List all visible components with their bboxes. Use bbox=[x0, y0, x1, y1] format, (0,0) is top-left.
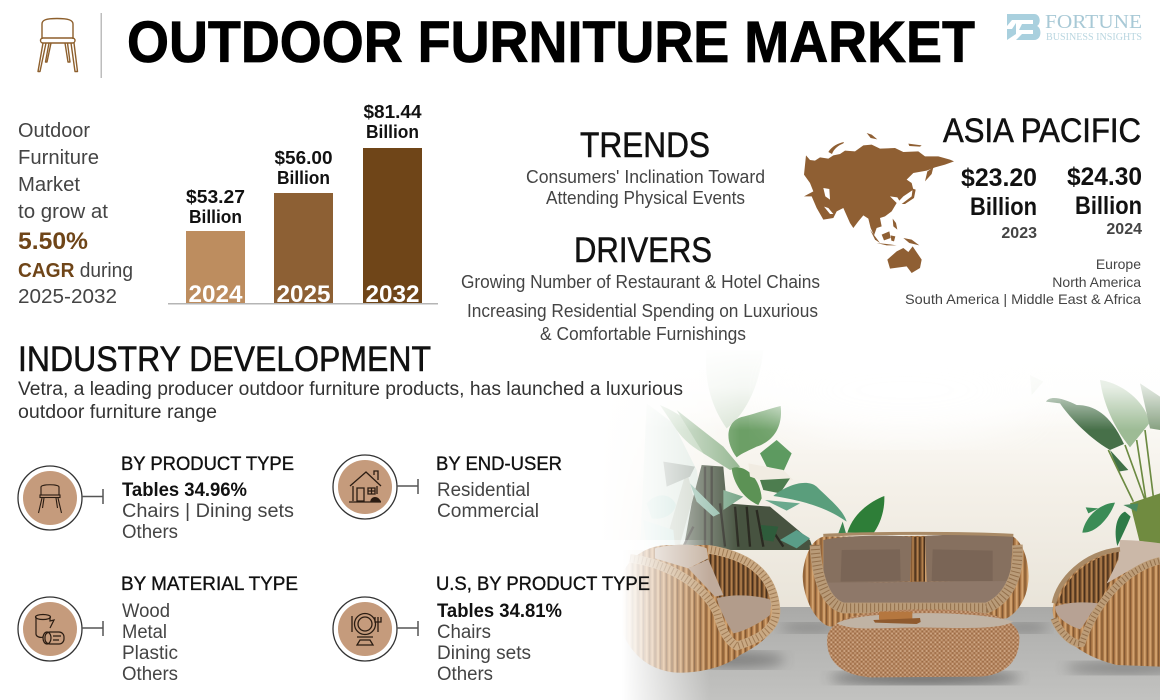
title: OUTDOOR FURNITURE MARKET bbox=[127, 10, 975, 75]
segment: U.S. by product type: Others bbox=[437, 664, 493, 685]
regional values: $24.30 bbox=[1067, 163, 1142, 191]
segment: U.S. by product type: U.S, BY PRODUCT TYPE bbox=[436, 574, 650, 595]
bar chart: market size: 2024 bbox=[188, 281, 243, 308]
industry development: INDUSTRY DEVELOPMENT bbox=[18, 340, 431, 379]
regional values: 2023 bbox=[1001, 225, 1037, 242]
text block: market growth summary: 5.50% bbox=[18, 228, 88, 255]
trends bbox=[526, 126, 765, 208]
other regions: South America | Middle East & Africa bbox=[905, 291, 1141, 307]
bar chart: market size: $56.00 bbox=[274, 147, 332, 168]
segment: U.S. by product type bbox=[333, 574, 650, 685]
sofa bbox=[803, 533, 1029, 627]
icon: place setting bbox=[352, 614, 381, 645]
trends: Consumers' Inclination Toward bbox=[526, 167, 765, 187]
left armchair bbox=[613, 545, 778, 673]
segment: U.S. by product type: Chairs bbox=[437, 622, 491, 643]
bar chart: market size: 2025 bbox=[276, 281, 330, 308]
heading: Asia Pacific: ASIA PACIFIC bbox=[943, 112, 1141, 150]
photo: wicker outdoor furniture with plants bbox=[600, 340, 1160, 700]
segment: by end-user: Commercial bbox=[437, 501, 539, 522]
bar chart: market size: Billion bbox=[189, 206, 242, 227]
segment: by product type bbox=[18, 454, 294, 543]
segment: by material type: Others bbox=[122, 664, 178, 685]
bar chart: market size: $53.27 bbox=[186, 186, 245, 207]
bar chart: market size: $81.44 bbox=[364, 101, 422, 122]
regional values: Billion bbox=[970, 193, 1037, 221]
bar chart: market size bbox=[168, 101, 438, 308]
segment: by end-user: BY END-USER bbox=[436, 454, 562, 475]
drivers: & Comfortable Furnishings bbox=[540, 324, 746, 344]
bar chart: market size: 2032 bbox=[366, 281, 420, 308]
segment: by product type: Others bbox=[122, 522, 178, 543]
other regions: North America bbox=[1052, 274, 1141, 290]
upper-left plant fade bbox=[600, 345, 740, 550]
segment: by material type: Plastic bbox=[122, 643, 178, 664]
other regions bbox=[905, 256, 1141, 307]
drivers bbox=[461, 231, 820, 344]
segment: by product type: BY PRODUCT TYPE bbox=[121, 454, 294, 475]
text block: market growth summary: Market bbox=[18, 174, 80, 196]
industry development: Vetra, a leading producer outdoor furniture products, has launched a luxurious bbox=[18, 379, 683, 400]
logo: Fortune Business Insights bbox=[1007, 11, 1142, 43]
other regions: Europe bbox=[1096, 256, 1141, 272]
regional values: $23.20 bbox=[961, 164, 1037, 192]
map: Asia Pacific bbox=[804, 133, 954, 273]
segment: by material type: Wood bbox=[122, 601, 170, 622]
segment: by end-user bbox=[333, 454, 562, 522]
bar chart: market size: Billion bbox=[366, 121, 419, 142]
segment: by material type bbox=[18, 574, 298, 685]
coffee table bbox=[827, 609, 1019, 677]
image fade overlays bbox=[600, 340, 1160, 700]
segment: by material type: BY MATERIAL TYPE bbox=[121, 574, 298, 595]
drivers: DRIVERS bbox=[574, 231, 712, 270]
trends: Attending Physical Events bbox=[546, 188, 745, 208]
text block: market growth summary bbox=[18, 120, 133, 308]
regional values bbox=[961, 163, 1142, 242]
icon: chair bbox=[38, 18, 78, 72]
industry development: outdoor furniture range bbox=[18, 402, 217, 423]
segment: by product type: Tables 34.96% bbox=[122, 480, 247, 501]
text block: market growth summary: CAGR during bbox=[18, 260, 133, 282]
regional values: 2024 bbox=[1106, 221, 1142, 238]
industry development bbox=[18, 340, 683, 423]
segment: by end-user: Residential bbox=[437, 480, 530, 501]
logo: Fortune Business Insights: FORTUNE bbox=[1045, 11, 1142, 33]
drivers: Increasing Residential Spending on Luxurious bbox=[467, 301, 818, 321]
logo: Fortune Business Insights: BUSINESS INSIGHTS bbox=[1046, 32, 1142, 43]
icon: logs bbox=[36, 614, 64, 644]
trends: TRENDS bbox=[580, 126, 710, 165]
text block: market growth summary: Furniture bbox=[18, 147, 99, 169]
segment: U.S. by product type: Dining sets bbox=[437, 643, 531, 664]
segment: by product type: Chairs | Dining sets bbox=[122, 501, 294, 522]
segment: U.S. by product type: Tables 34.81% bbox=[437, 601, 562, 622]
right plant bbox=[1030, 375, 1160, 546]
regional values: Billion bbox=[1075, 192, 1142, 220]
floor shadows bbox=[685, 623, 1160, 684]
text block: market growth summary: to grow at bbox=[18, 201, 108, 223]
left plant bbox=[640, 350, 884, 550]
drivers: Growing Number of Restaurant & Hotel Chains bbox=[461, 272, 820, 292]
segment: by material type: Metal bbox=[122, 622, 167, 643]
bar chart: market size: Billion bbox=[277, 167, 330, 188]
right armchair bbox=[1053, 540, 1160, 667]
text block: market growth summary: 2025-2032 bbox=[18, 286, 117, 308]
icon: chair small bbox=[38, 485, 62, 513]
text block: market growth summary: Outdoor bbox=[18, 120, 90, 142]
icon: house bbox=[349, 471, 381, 502]
divider bbox=[100, 13, 102, 78]
